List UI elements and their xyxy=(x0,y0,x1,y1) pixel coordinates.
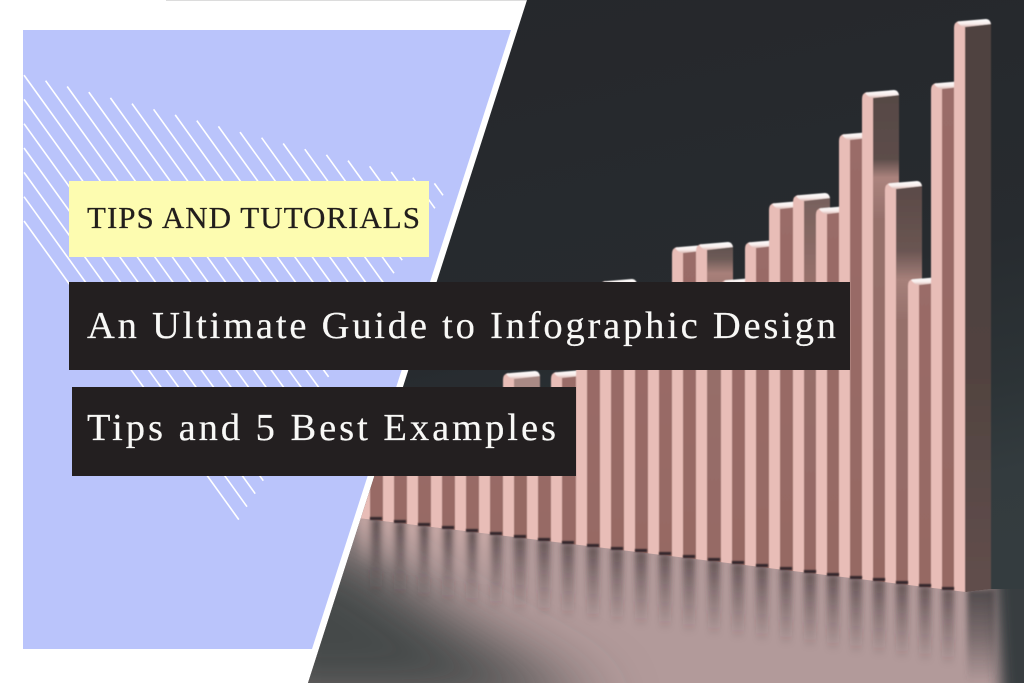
subtitle banner xyxy=(72,387,576,476)
top edge line xyxy=(166,0,527,1)
bar contact shadows xyxy=(370,517,954,590)
title banner: main headline xyxy=(69,282,850,370)
title banner: main headline: An Ultimate Guide to Infographic Design xyxy=(87,305,836,347)
category tag: tips and tutorials xyxy=(69,181,429,257)
3D pink bars xyxy=(359,19,991,600)
panel: dark photo of 3D bar chart xyxy=(250,0,1024,683)
subtitle banner: Tips and 5 Best Examples xyxy=(87,407,556,449)
reflective floor xyxy=(308,518,1014,683)
panel: periwinkle background xyxy=(23,30,511,649)
diagonal white hatching xyxy=(24,75,443,520)
category tag: tips and tutorials: TIPS AND TUTORIALS xyxy=(87,200,420,235)
